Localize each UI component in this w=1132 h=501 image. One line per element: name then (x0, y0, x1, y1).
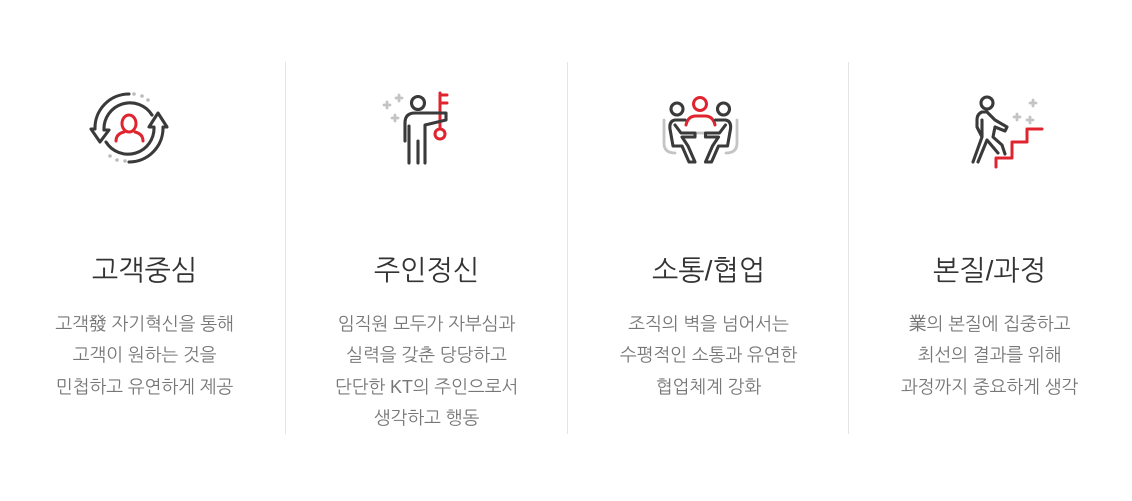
text block (55, 314, 234, 396)
text block: 과정까지 중요하게 생각 (901, 376, 1078, 396)
text block: 단단한 KT의 주인으로서 (335, 376, 518, 396)
text block (335, 314, 518, 428)
icon: person climbing stairs (971, 96, 1044, 168)
panel: 주인정신 (335, 92, 518, 428)
heading: 고객중심 (92, 254, 197, 286)
text block: 협업체계 강화 (656, 376, 761, 396)
text block: 고객이 원하는 것을 (73, 345, 216, 365)
icon: three people at a table (662, 96, 738, 164)
text block: 수평적인 소통과 유연한 (620, 345, 797, 365)
text block: 조직의 벽을 넘어서는 (628, 314, 789, 334)
text block: 생각하고 행동 (374, 408, 479, 428)
text block (620, 314, 798, 396)
text block: 고객發 자기혁신을 통해 (55, 314, 234, 334)
panel: 소통/협업 (620, 96, 798, 396)
heading: 주인정신 (374, 254, 479, 286)
text block: 최선의 결과를 위해 (918, 345, 1061, 365)
text block: 실력을 갖춘 당당하고 (346, 345, 507, 365)
panel: 고객중심 (55, 92, 234, 396)
text block: 임직원 모두가 자부심과 (338, 314, 515, 334)
text block (901, 314, 1078, 396)
text block: 민첩하고 유연하게 제공 (56, 376, 233, 396)
text block: 業의 본질에 집중하고 (909, 314, 1070, 334)
icon: person holding key (382, 92, 448, 164)
heading: 본질/과정 (933, 254, 1046, 286)
panel: 본질/과정 (901, 96, 1078, 396)
heading: 소통/협업 (652, 254, 765, 286)
icon: rotating arrows around customer (90, 92, 168, 164)
